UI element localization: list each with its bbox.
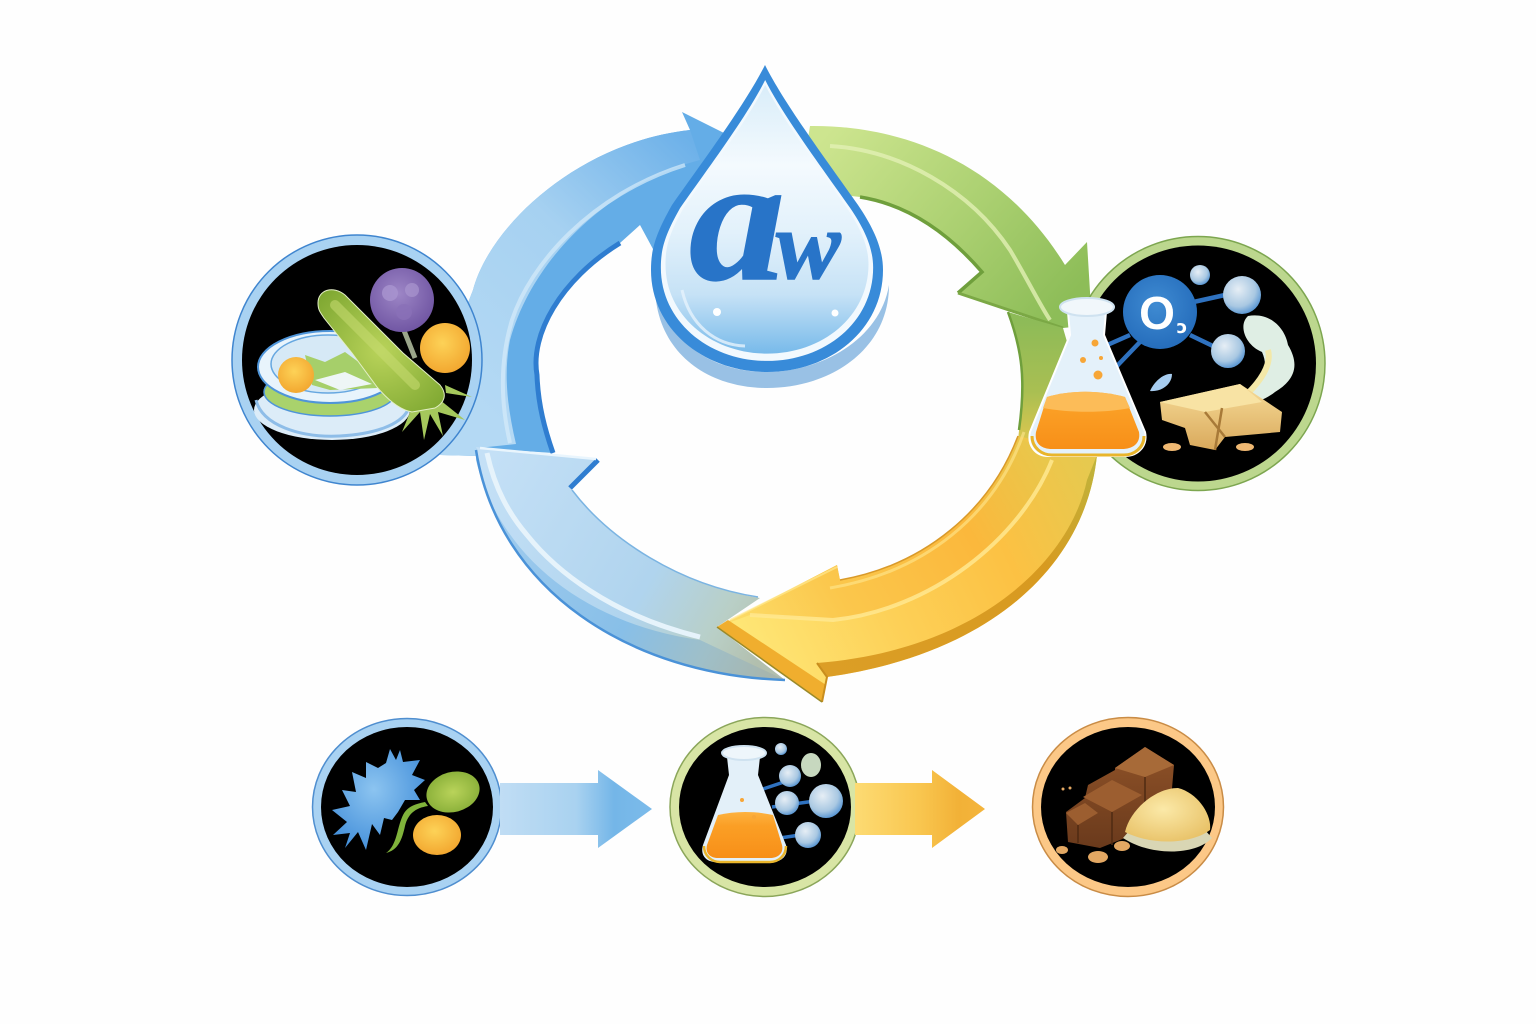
arrow: yellow, from oxidation to browning — [717, 312, 1100, 702]
icon: butter block — [1160, 384, 1282, 451]
icon: small flask — [702, 746, 787, 862]
icon: ozone molecule: ɔ — [1177, 317, 1187, 338]
icon: molecules — [763, 743, 843, 848]
icon: chocolate blocks — [1066, 747, 1174, 848]
icon: blue fragment — [1150, 374, 1172, 391]
arrow: yellow step arrow — [855, 770, 985, 848]
icon: ozone molecule — [1105, 265, 1261, 368]
icon: green spore with stem — [386, 766, 484, 853]
icon: petri dish — [254, 331, 410, 440]
water drop shadow — [655, 285, 889, 388]
process step: reaction — [670, 718, 860, 896]
icon: purple spore — [370, 268, 434, 358]
arrow: blue step arrow — [500, 770, 652, 848]
symbol a-w: w — [776, 192, 842, 299]
arrow: green, from drop to oxidation — [800, 126, 1092, 328]
symbol a-w: a — [689, 121, 785, 318]
microbe circle: petri dish, cucumber and spores — [232, 235, 482, 485]
icon: grass roots — [402, 385, 472, 440]
process step: microbes — [312, 718, 502, 896]
icon: ozone molecule: O — [1139, 287, 1175, 339]
icon: orange spore — [413, 815, 461, 855]
arrow: lower blue, returning to microbes — [476, 447, 785, 680]
process step: browning products — [1032, 718, 1224, 896]
water drop with a-w symbol — [651, 65, 883, 372]
icon: smoke — [1238, 315, 1294, 403]
icon: dough mound — [1123, 788, 1212, 852]
icon: orange spore — [420, 323, 470, 373]
arrow: top blue, from microbes to water drop — [430, 112, 760, 456]
icon: large flask with orange liquid — [1029, 298, 1146, 456]
icon: cucumber — [318, 290, 444, 412]
oxidation circle: ozone molecule and butter — [1071, 236, 1325, 490]
symbol a-w — [689, 121, 842, 318]
icon: crumbs — [1056, 786, 1130, 863]
icon: blue spiky bacterium — [332, 749, 425, 850]
